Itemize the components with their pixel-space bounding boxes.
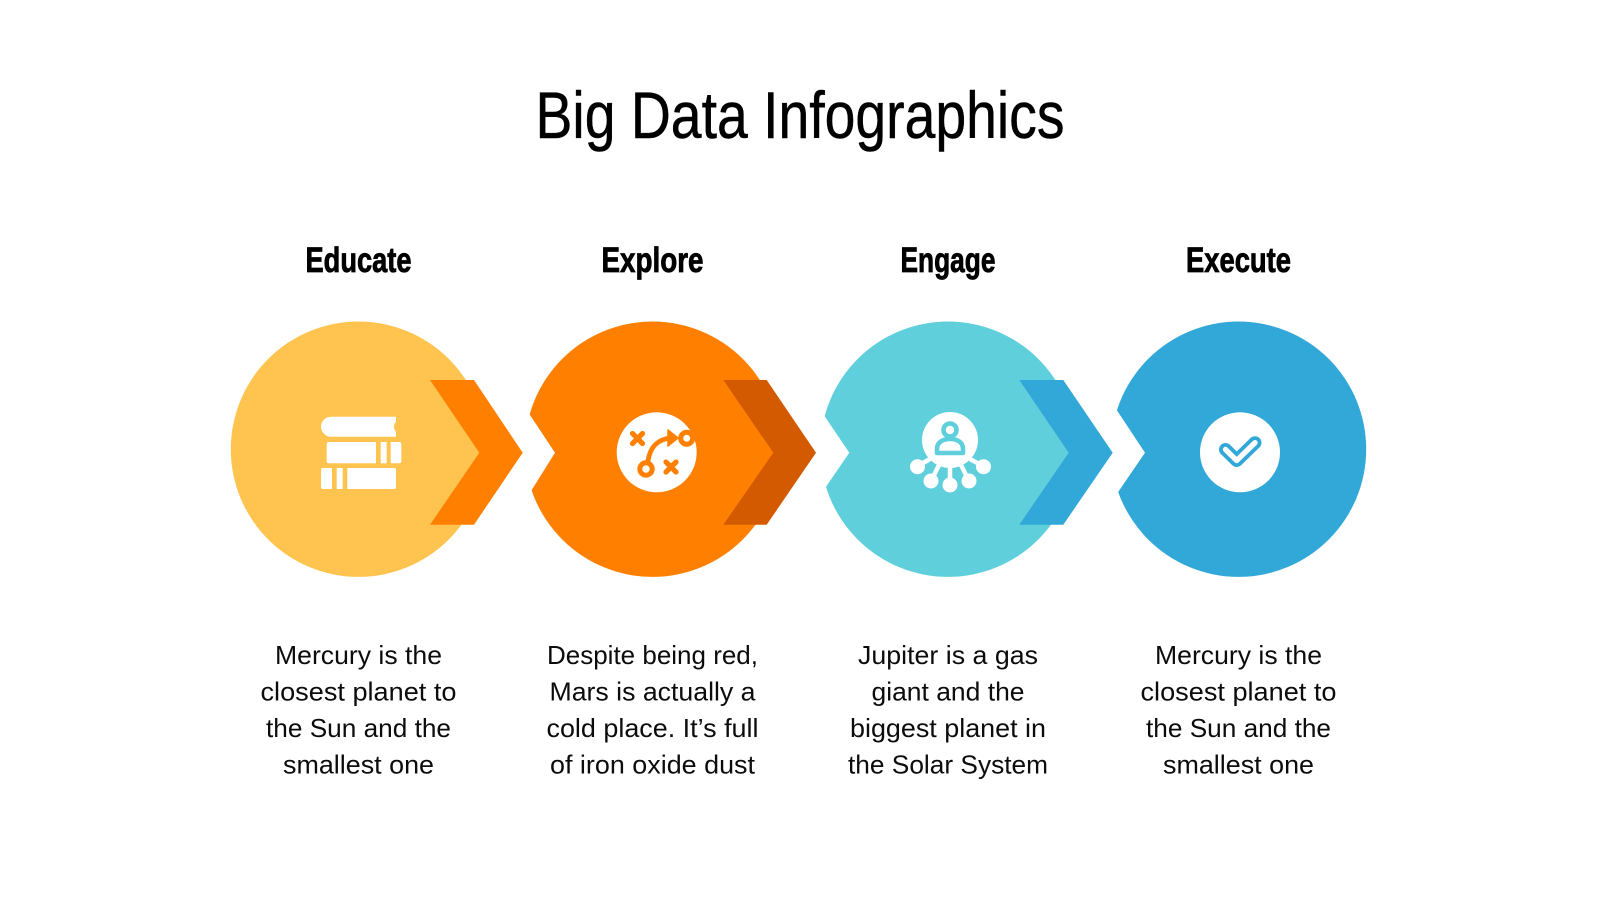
title: Big Data Infographics xyxy=(536,78,1064,152)
body text: execute xyxy=(1140,640,1336,780)
panel: educate xyxy=(231,241,486,780)
body text: engage: Jupiter is a gas xyxy=(858,640,1038,670)
body text: explore: Despite being red, xyxy=(547,640,758,670)
body text: educate: Mercury is the xyxy=(275,640,442,670)
icon: books xyxy=(321,417,401,489)
arrow: educate to explore xyxy=(430,380,523,525)
body text: engage xyxy=(848,640,1048,780)
body text: educate: closest planet to xyxy=(260,676,456,706)
body text: engage: giant and the xyxy=(872,676,1024,706)
circle: explore xyxy=(515,322,780,577)
icon: user network xyxy=(910,412,991,492)
body text: educate: the Sun and the xyxy=(266,713,451,743)
body text: explore: cold place. It’s full xyxy=(546,713,758,743)
arrow: engage to execute xyxy=(1019,380,1113,525)
circle: execute xyxy=(1100,322,1366,577)
body text: explore: Mars is actually a xyxy=(550,676,756,706)
panel: execute xyxy=(1100,241,1366,780)
body text: engage: biggest planet in xyxy=(850,713,1046,743)
body text: execute: Mercury is the xyxy=(1155,640,1322,670)
icon: check mark xyxy=(1200,412,1280,492)
heading: engage: Engage xyxy=(900,241,996,280)
body text: execute: closest planet to xyxy=(1140,676,1336,706)
body text: educate: smallest one xyxy=(283,750,434,780)
body text: execute: smallest one xyxy=(1163,750,1314,780)
panel: explore xyxy=(515,241,780,780)
body text: explore xyxy=(546,640,758,780)
heading: educate: Educate xyxy=(306,241,412,280)
circle: engage xyxy=(812,322,1076,577)
body text: explore: of iron oxide dust xyxy=(550,750,756,780)
icon: route map xyxy=(617,412,697,492)
arrow: explore to engage xyxy=(723,380,816,525)
heading: explore: Explore xyxy=(602,241,704,280)
body text: engage: the Solar System xyxy=(848,750,1048,780)
heading: execute: Execute xyxy=(1186,241,1291,280)
body text: educate xyxy=(260,640,456,780)
panel: engage xyxy=(812,241,1076,780)
circle: educate xyxy=(231,322,486,577)
body text: execute: the Sun and the xyxy=(1146,713,1331,743)
